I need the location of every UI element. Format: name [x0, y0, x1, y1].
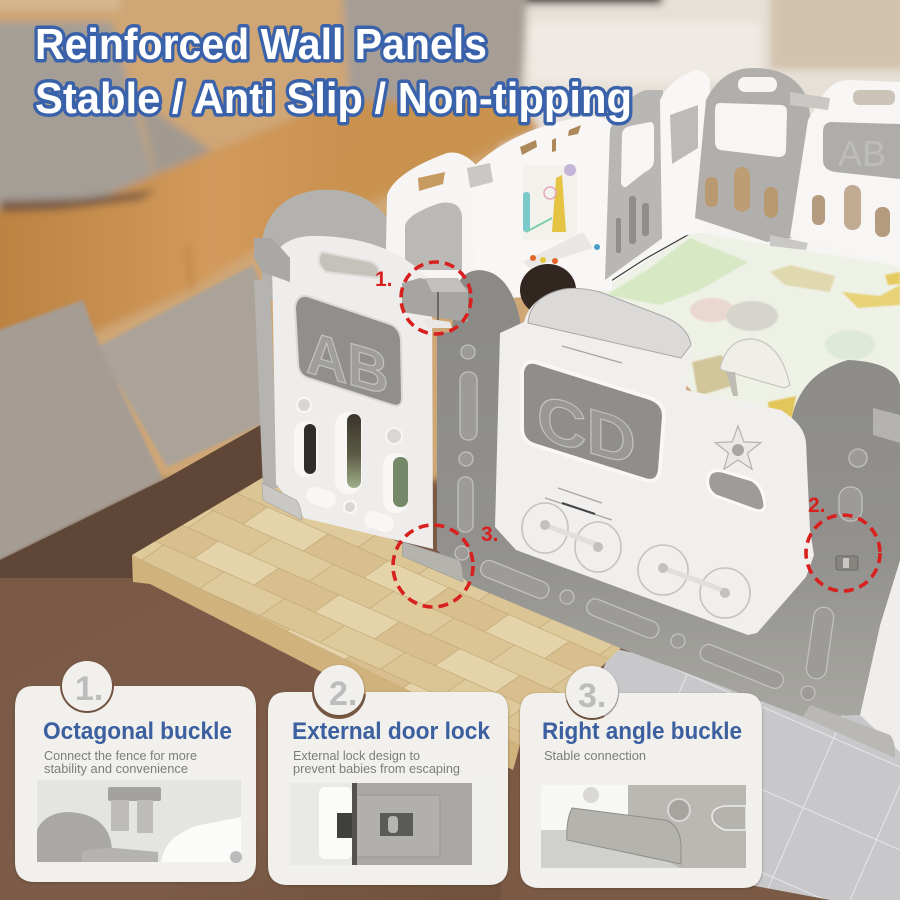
callout numbers	[375, 268, 826, 546]
panel: white rear panel	[385, 152, 480, 300]
callout circle 3	[393, 525, 473, 607]
description: stability and convenience	[44, 762, 188, 776]
handle	[319, 252, 379, 278]
top-left connector	[254, 238, 290, 282]
connector buckle 1	[402, 278, 468, 328]
heading: Right angle buckle	[542, 718, 742, 745]
wheels	[522, 503, 750, 618]
callout circle 1	[401, 262, 471, 334]
mat animal prints	[607, 238, 900, 435]
play mat	[600, 232, 900, 430]
description: External lock design to	[293, 749, 420, 763]
wood floor lower right	[500, 700, 770, 900]
panel: gray rear panel	[605, 90, 664, 280]
CD gray plate	[522, 362, 664, 481]
number 2: 2.	[808, 494, 826, 517]
photo: bracket detail	[541, 785, 746, 868]
AB panel back rail	[254, 280, 278, 488]
number 3: 3.	[481, 523, 499, 546]
heading: Octagonal buckle	[43, 718, 232, 745]
description: Stable connection	[544, 749, 646, 763]
rear panel drawing	[523, 164, 577, 240]
card 2: external door lock	[268, 665, 508, 885]
card 1: octagonal buckle	[15, 661, 256, 882]
wood floor	[0, 423, 640, 900]
number badge: 3.	[578, 677, 606, 715]
callouts: red dashed circles	[393, 262, 880, 607]
panel: gray arc left rear	[262, 190, 392, 300]
photo: lock detail	[290, 783, 494, 865]
bracket on right hump	[873, 408, 900, 443]
pillow left	[0, 300, 163, 570]
title line 1: Reinforced Wall Panels	[35, 20, 487, 69]
callout circle 2	[806, 515, 880, 591]
panel: CD train gate	[495, 288, 814, 635]
lock on right hump	[836, 556, 858, 570]
CD gray plate: CD	[537, 380, 636, 480]
card 3: right angle buckle	[520, 666, 762, 888]
icon: star	[715, 426, 761, 469]
pillow right	[97, 265, 266, 467]
panel: white AB rear panel	[790, 80, 900, 267]
column slots and holes	[455, 345, 867, 700]
tiled wooden platform	[132, 478, 622, 770]
rear handle holes	[520, 125, 581, 155]
number badge: 2.	[329, 675, 357, 713]
foreground far right white panel	[860, 560, 900, 752]
back fence panels	[262, 68, 900, 316]
half round catch	[720, 339, 790, 388]
rear clips	[467, 92, 830, 250]
toy with tunnel	[520, 232, 600, 316]
cab lines	[545, 346, 622, 520]
gray frame with train silhouette	[437, 270, 900, 717]
white half-round stem	[726, 372, 738, 396]
gray tile floor	[590, 648, 900, 900]
panel: white rear panel 2	[660, 70, 710, 240]
right angle bracket 3	[402, 542, 463, 582]
white fence backing	[470, 100, 900, 300]
mat edge line	[597, 232, 693, 290]
title	[35, 20, 632, 123]
AB gray plate	[295, 296, 402, 408]
number 1: 1.	[375, 268, 393, 291]
lower slots	[294, 398, 408, 534]
photo: buckle detail	[37, 780, 242, 863]
sofa pillows	[0, 265, 266, 570]
heading: External door lock	[292, 718, 491, 745]
panel: AB gate	[272, 236, 433, 549]
train cab roof	[528, 288, 691, 358]
AB gray plate: AB	[306, 318, 389, 408]
corner bracket left	[262, 483, 302, 520]
title line 2: Stable / Anti Slip / Non-tipping	[35, 74, 632, 123]
bottom right bracket	[803, 705, 895, 758]
panel: white panel with giraffe drawing	[470, 116, 613, 300]
description: Connect the fence for more	[44, 749, 197, 763]
panel: gray framed rear panel	[695, 68, 810, 242]
blurred room background	[0, 0, 900, 480]
funnel window	[708, 471, 765, 511]
rear AB plate	[823, 122, 900, 179]
description: prevent babies from escaping	[293, 762, 460, 776]
number badge: 1.	[75, 670, 103, 708]
rear AB plate: AB	[838, 133, 886, 174]
